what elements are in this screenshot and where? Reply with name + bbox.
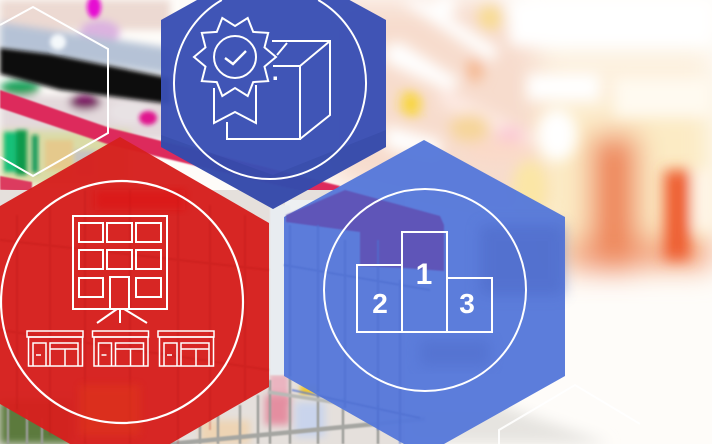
outline hexagon: top left	[0, 7, 108, 176]
cart handle showing through	[286, 190, 444, 271]
panel: light blue hexagon with podium	[284, 140, 565, 444]
podium number 3: 3	[459, 288, 475, 319]
icon: product box	[227, 41, 330, 139]
icon: podium	[357, 232, 492, 332]
circle outline	[324, 189, 526, 391]
top-left shelf colours	[0, 0, 170, 185]
podium number 1: 1	[416, 258, 432, 291]
icon: head office building	[73, 216, 167, 323]
wire basket bars	[8, 375, 425, 444]
cart wires showing through	[284, 225, 430, 444]
circle outline	[1, 181, 243, 423]
panel: dark blue hexagon with quality product	[161, 0, 386, 209]
cart bars showing through	[0, 190, 269, 444]
circle outline	[174, 0, 366, 179]
icon: quality seal with check and ribbon	[194, 18, 276, 123]
cart handle and lower basket backdrop	[0, 90, 340, 200]
icon: three stores	[27, 331, 214, 366]
panel: red hexagon with building and stores	[0, 137, 269, 444]
aisle shelves and far store	[330, 0, 712, 270]
podium number 2: 2	[372, 288, 388, 319]
outline hexagon: bottom right	[499, 385, 640, 444]
